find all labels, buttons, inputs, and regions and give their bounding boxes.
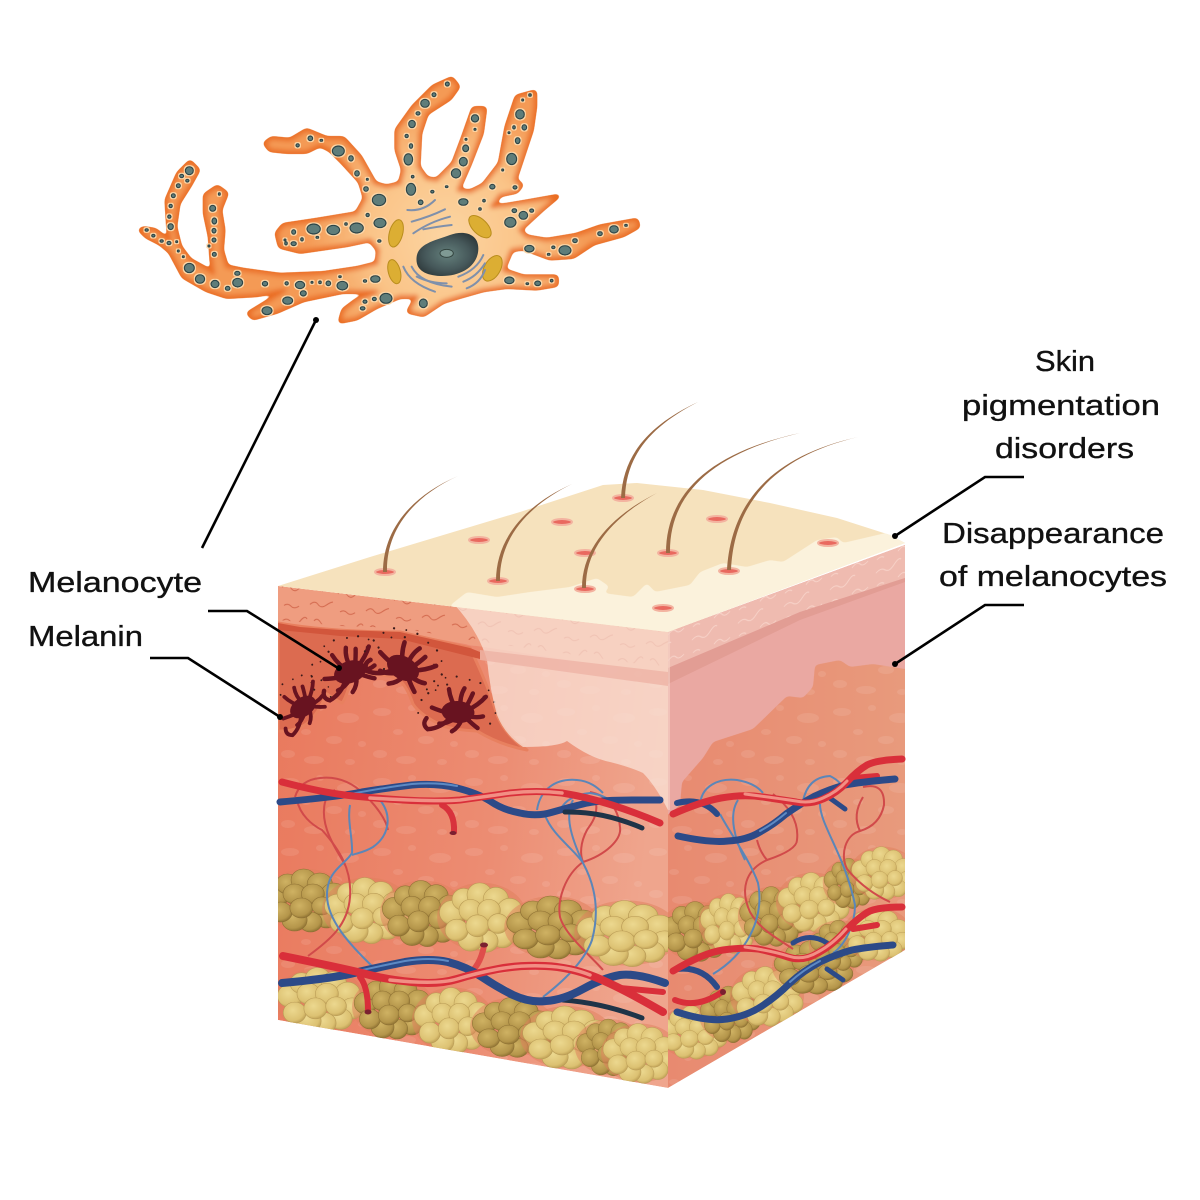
label: Skin pigmentation disorders: pigmentation xyxy=(962,390,1160,422)
golgi apparatus xyxy=(403,200,485,292)
blood vessels right xyxy=(673,759,902,1020)
right face of the skin block xyxy=(668,545,905,1088)
vein xyxy=(280,783,660,815)
vein right lower xyxy=(677,945,893,1020)
melanin layer xyxy=(278,623,527,750)
right epidermis texture xyxy=(668,545,905,668)
vein lower xyxy=(282,959,665,1001)
left face of the skin block xyxy=(256,586,670,1090)
melanocyte cell illustration xyxy=(140,78,638,322)
right epidermis xyxy=(668,545,905,668)
leader: melanocyte xyxy=(208,611,342,671)
red stub xyxy=(675,989,726,1003)
leader: melanin xyxy=(150,658,283,720)
right band xyxy=(668,578,905,684)
capillaries right xyxy=(700,776,890,974)
fat cells left xyxy=(261,869,680,1083)
right dermis texture xyxy=(668,640,908,1090)
label: Skin pigmentation disorders xyxy=(962,346,1160,465)
depigmented top patch xyxy=(451,534,904,632)
red branch down xyxy=(360,977,372,1014)
red short right xyxy=(620,988,663,992)
label: Melanocyte: Melanocyte xyxy=(28,567,202,599)
melanosomes xyxy=(145,82,627,315)
red branch up xyxy=(467,942,488,975)
artery lower xyxy=(283,956,663,1012)
thin capillaries left xyxy=(295,778,620,997)
fat cells right xyxy=(658,847,916,1059)
artery right upper xyxy=(673,759,902,814)
short vessels upper xyxy=(677,776,877,814)
epidermis squiggles xyxy=(278,586,668,668)
red branch xyxy=(442,805,456,835)
label: Melanin: Melanin xyxy=(28,621,143,653)
depigmented patch xyxy=(453,603,668,810)
nucleus xyxy=(416,233,478,276)
top face of the skin block xyxy=(278,483,905,632)
artery right lower xyxy=(673,907,902,971)
depigmented dermis xyxy=(668,545,905,814)
label: Disappearance of melanocytes: Disappearance xyxy=(942,518,1164,550)
pale stripe xyxy=(480,650,668,686)
leader: skin pigmentation disorders xyxy=(892,477,1024,539)
hairs xyxy=(383,402,858,588)
label: Skin pigmentation disorders: disorders xyxy=(995,433,1134,465)
label: Disappearance of melanocytes xyxy=(939,518,1167,593)
label: Skin pigmentation disorders: Skin xyxy=(1035,346,1095,378)
right front strip xyxy=(668,630,670,810)
artery xyxy=(282,782,660,823)
vein right upper xyxy=(678,779,895,841)
melanocytes with melanin xyxy=(278,627,496,738)
mitochondria xyxy=(385,212,506,285)
short vessels lower xyxy=(677,925,877,987)
epidermis band xyxy=(278,586,666,647)
dark stripe xyxy=(278,623,480,659)
label: Disappearance of melanocytes: of melanocytes xyxy=(939,561,1167,593)
blood vessels upper left xyxy=(280,782,660,835)
right dermis xyxy=(668,545,905,1088)
dark branch xyxy=(565,812,642,828)
blood vessels lower left xyxy=(282,942,665,1018)
dermis texture xyxy=(281,644,667,1066)
cell body xyxy=(140,78,638,322)
dermis xyxy=(278,586,668,1088)
leader: disappearance of melanocytes xyxy=(892,605,1024,667)
skin cube xyxy=(256,402,920,1090)
leader: melanocyte cell xyxy=(202,317,319,548)
hair follicles xyxy=(375,495,838,611)
dark branch lower xyxy=(563,1000,642,1018)
